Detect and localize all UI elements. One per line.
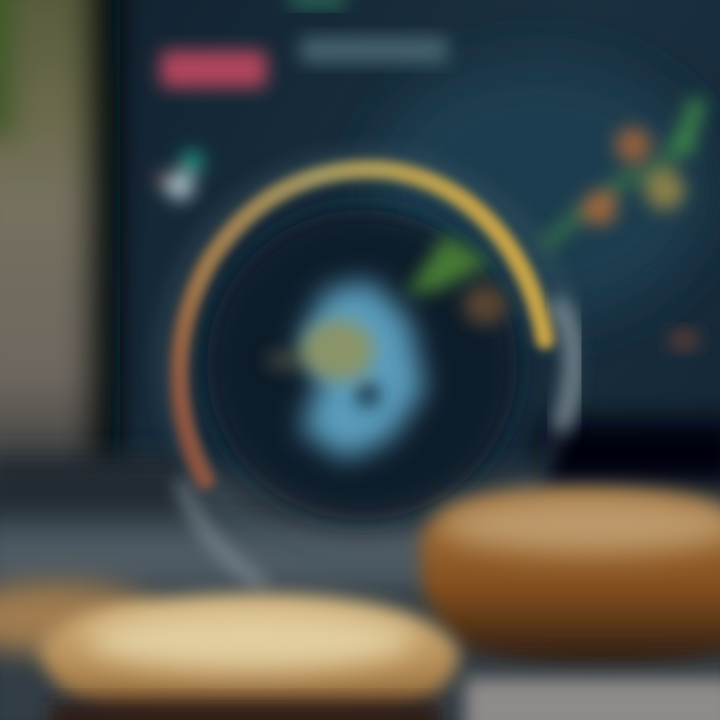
blurred heading [300, 37, 448, 63]
small teal icon [156, 150, 204, 200]
pink label [160, 50, 267, 88]
glass ring [163, 155, 574, 585]
line chart: candles [545, 105, 700, 245]
floor bottom right [465, 678, 720, 720]
inner dial [207, 210, 517, 520]
faint red marker [668, 330, 700, 350]
front coin bowl [40, 595, 460, 720]
screen glow [370, 60, 710, 320]
desk surface [0, 455, 720, 720]
top green mark [290, 0, 345, 7]
emblem core [267, 320, 381, 408]
right coin bowl [420, 490, 720, 664]
central blue emblem [300, 280, 425, 460]
left wall strip [0, 0, 119, 480]
screen bottom shadow [540, 420, 720, 485]
gauge arc [179, 169, 545, 480]
green needle [405, 235, 507, 325]
far left coin bowl [0, 582, 160, 654]
